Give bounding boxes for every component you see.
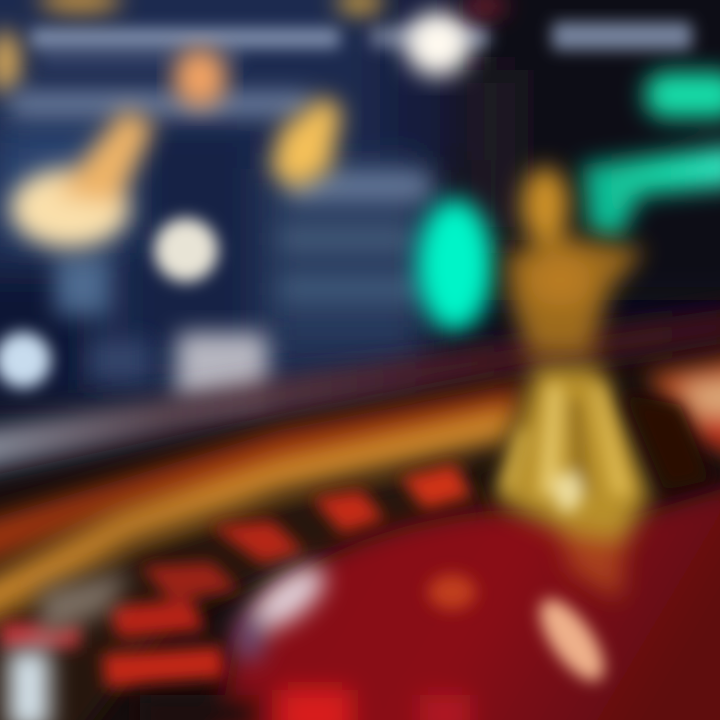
top gold accents xyxy=(0,0,507,94)
icon: gold trophy skirt xyxy=(495,365,650,600)
icon: pale highlight on chip xyxy=(234,555,335,663)
icon: gold trophy figure xyxy=(505,167,645,355)
icon: teal arrows right xyxy=(582,72,720,240)
panel: text block rows xyxy=(10,92,430,380)
icon: teal glow centre xyxy=(417,199,493,331)
icon: white orb in title xyxy=(405,12,471,76)
icon: gold hand left xyxy=(10,108,155,248)
icon: orange figure top xyxy=(173,48,227,108)
icon: gold hand right xyxy=(270,95,342,190)
panel: roulette wheel body xyxy=(0,355,720,720)
wheel grey rim segments xyxy=(8,570,130,720)
panel: red chips foreground xyxy=(140,480,720,720)
panel: roulette wheel rim xyxy=(0,305,720,472)
icon: pale highlight lower right xyxy=(428,574,616,691)
icon: pale blue circle xyxy=(0,332,51,388)
panel: dark base under the screen xyxy=(0,330,720,720)
wheel red pockets xyxy=(0,464,472,688)
icon: pale circle xyxy=(154,218,218,282)
icon: pale block xyxy=(176,332,268,404)
wheel dark wedge beside trophy xyxy=(625,395,710,490)
panel: blue screen background xyxy=(0,0,720,400)
heading: blurred title bar xyxy=(30,22,692,66)
trophy skirt highlights xyxy=(502,385,632,512)
